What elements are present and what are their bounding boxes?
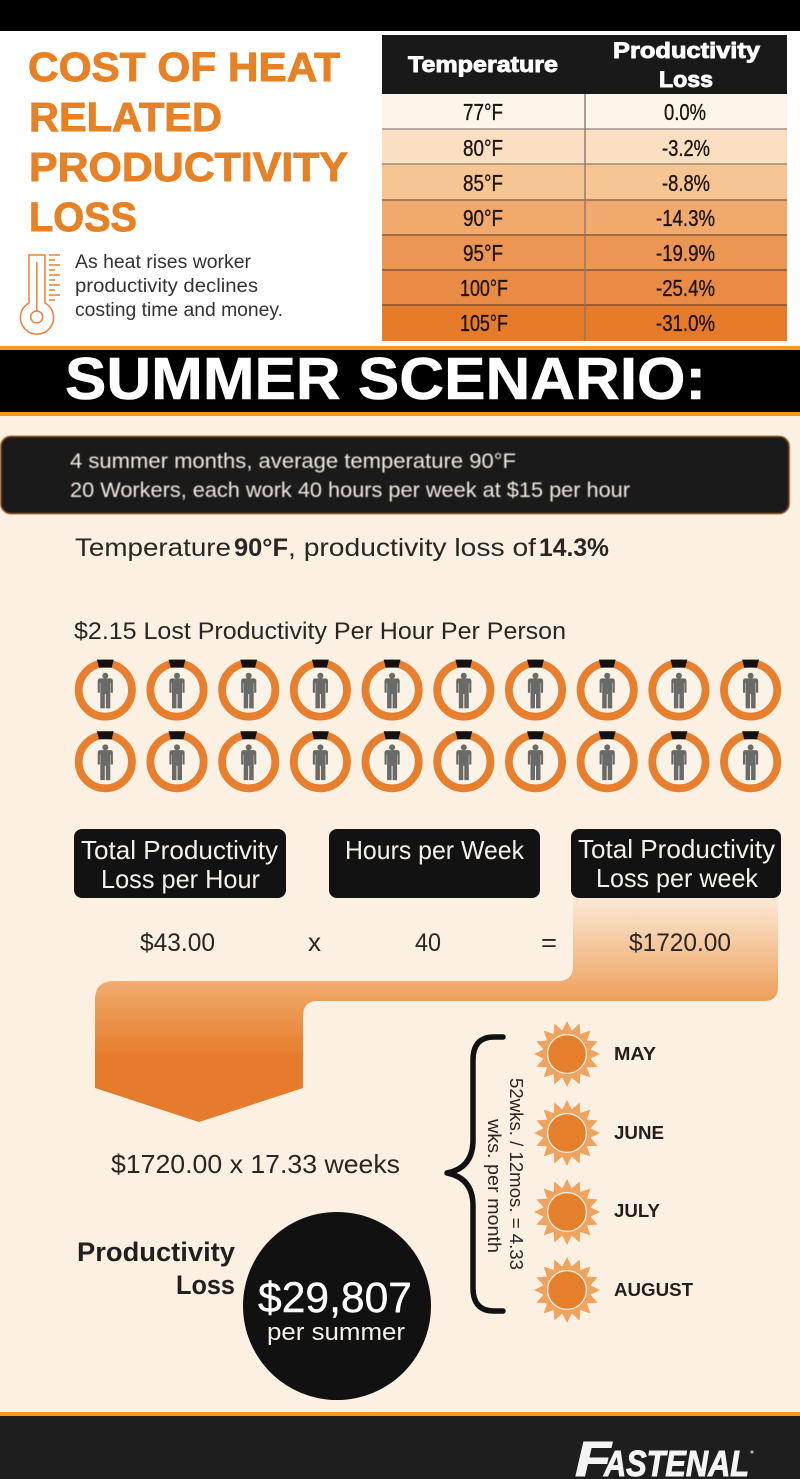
table values: -3.2% [662, 135, 710, 161]
label: productivity loss: Loss [176, 1270, 235, 1300]
intro text: costing time and money. [75, 300, 283, 321]
temperature and loss statement: , productivity loss of [288, 534, 536, 562]
scenario assumptions box: 20 Workers, each work 40 hours per week at $15 per hour [70, 479, 630, 502]
result circle: $29,807 per summer [243, 1212, 431, 1400]
icon: sun July [534, 1179, 600, 1245]
table values: 90°F [463, 205, 503, 231]
lost productivity per hour heading: $2.15 Lost Productivity Per Hour Per Person [74, 618, 566, 645]
white header panel [0, 31, 800, 346]
table header: Loss [659, 67, 713, 92]
rotated note: weeks per month: 52wks. / 12mos. = 4.33 [506, 1078, 526, 1270]
table header: Productivity [613, 38, 761, 63]
scenario assumptions box: 4 summer months, average temperature 90°F [70, 450, 516, 473]
table values: -14.3% [656, 205, 715, 231]
label: total productivity loss per week [571, 829, 781, 898]
icon: thermometer [20, 255, 60, 334]
equation values: = [541, 929, 557, 957]
temperature and loss statement [75, 534, 609, 562]
result circle: $29,807 per summer: per summer [267, 1319, 405, 1346]
arrow: weekly loss flowing down [95, 896, 778, 1122]
table row colour bands [382, 94, 787, 341]
top black band [0, 0, 800, 31]
table values: 100°F [460, 275, 508, 301]
seasonal calculation: $1720.00 x 17.33 weeks [111, 1149, 400, 1179]
rotated note: weeks per month [484, 1078, 526, 1270]
title: COST OF HEAT [28, 44, 340, 90]
equation values: x [308, 929, 322, 957]
icon: sun May [534, 1021, 600, 1087]
table header [382, 35, 787, 94]
intro text [75, 252, 283, 321]
table values: 77°F [463, 99, 503, 125]
label: total productivity loss per hour: Total Productivity [81, 835, 278, 865]
table values: 80°F [463, 135, 503, 161]
label: total productivity loss per week: Total Productivity [578, 834, 775, 864]
label: productivity loss [77, 1237, 235, 1300]
label: total productivity loss per week: Loss per week [596, 863, 759, 893]
month: May: MAY [614, 1044, 656, 1064]
intro text: productivity declines [75, 276, 258, 297]
banner: summer scenario: SUMMER SCENARIO: [65, 346, 706, 412]
equation values: 40 [415, 929, 441, 957]
scenario assumptions box [1, 436, 789, 514]
months with sun icons [534, 1021, 693, 1323]
table values [460, 99, 715, 336]
table values: -25.4% [656, 275, 715, 301]
title: PRODUCTIVITY [29, 144, 348, 190]
table values: 95°F [463, 240, 503, 266]
equation values [140, 929, 731, 957]
month: July: JULY [614, 1201, 660, 1221]
curly brace [447, 1037, 503, 1311]
footer band [0, 1412, 800, 1479]
label: hours per week [329, 829, 540, 898]
label: productivity loss: Productivity [77, 1237, 235, 1267]
logo: Fastenal [575, 1433, 754, 1479]
table values: -31.0% [656, 310, 715, 336]
temperature and loss statement: Temperature [75, 534, 231, 562]
table values: 85°F [463, 170, 503, 196]
result circle: $29,807 per summer: $29,807 [258, 1274, 412, 1322]
table: temperature vs productivity loss [382, 35, 787, 341]
equation values: $43.00 [140, 929, 215, 957]
table values: 0.0% [664, 99, 706, 125]
icon: sun August [534, 1257, 600, 1323]
table values: -19.9% [656, 240, 715, 266]
title [28, 44, 348, 240]
month: June: JUNE [614, 1123, 664, 1143]
label: hours per week: Hours per Week [345, 835, 525, 865]
temperature and loss statement: 90°F [234, 534, 288, 562]
table values: 105°F [460, 310, 508, 336]
table values: -8.8% [662, 170, 710, 196]
title: LOSS [29, 194, 137, 240]
label: total productivity loss per hour: Loss per Hour [101, 864, 260, 894]
temperature and loss statement: 14.3% [539, 534, 609, 562]
month: August: AUGUST [614, 1280, 693, 1300]
table header: Temperature [408, 52, 558, 77]
equation values: $1720.00 [629, 929, 731, 957]
rotated note: weeks per month: wks. per month [484, 1118, 504, 1253]
title: RELATED [29, 94, 222, 140]
intro text: As heat rises worker [75, 252, 252, 273]
icon: sun June [534, 1100, 600, 1166]
icons: 20 workers, two rows of ten [79, 660, 777, 788]
label: total productivity loss per hour [74, 829, 286, 898]
